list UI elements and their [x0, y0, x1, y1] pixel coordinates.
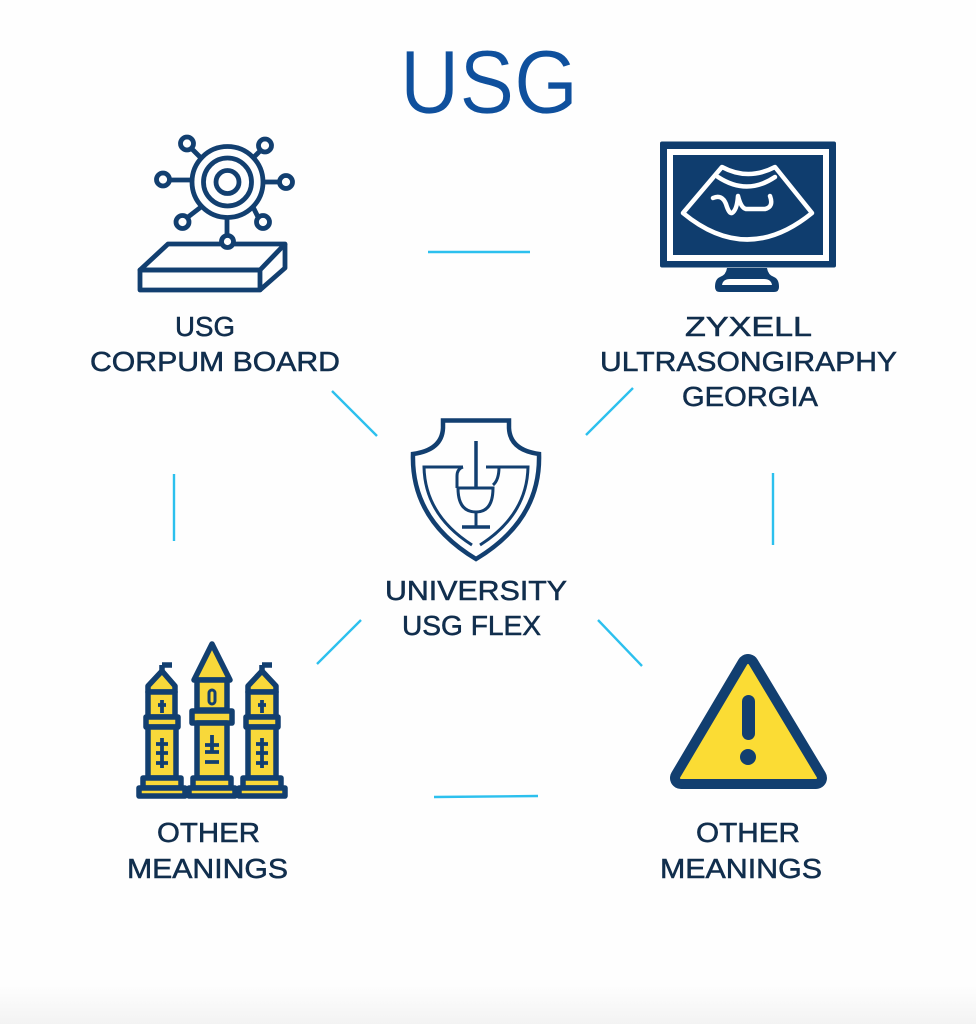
- label: Other Meanings right: MEANINGS: [660, 853, 822, 884]
- node: University USG Flex: [385, 420, 567, 641]
- label: University USG Flex: UNIVERSITY: [385, 575, 567, 606]
- node: Ultrasonography Georgia: [600, 142, 897, 412]
- label: Zyxell Ultrasongiraphy Georgia: ZYXELL: [685, 311, 812, 342]
- label: Zyxell Ultrasongiraphy Georgia: ULTRASONGIRAPHY: [600, 346, 897, 377]
- node: USG Corpum Board: [90, 137, 340, 377]
- label: USG Corpum Board: [90, 311, 340, 377]
- label: Other Meanings right: [660, 817, 822, 884]
- node: Other Meanings (warning): [660, 665, 822, 884]
- connector lines: [174, 252, 773, 797]
- label: USG Corpum Board: CORPUM BOARD: [90, 346, 340, 377]
- icon: ultrasound monitor: [660, 142, 836, 292]
- label: Zyxell Ultrasongiraphy Georgia: GEORGIA: [682, 381, 818, 412]
- label: USG Corpum Board: USG: [175, 311, 235, 342]
- label: University USG Flex: [385, 575, 567, 641]
- icon: shield with goblet: [413, 420, 539, 559]
- label: Other Meanings right: OTHER: [696, 817, 800, 848]
- label: Other Meanings left: OTHER: [157, 817, 260, 848]
- node: Other Meanings (towers): [127, 644, 288, 884]
- tower: right: [239, 665, 285, 796]
- label: Zyxell Ultrasongiraphy Georgia: [600, 311, 897, 412]
- icon: warning triangle: [681, 665, 816, 778]
- tower: center: [189, 644, 235, 796]
- icon: three yellow towers: [139, 644, 285, 796]
- label: Other Meanings left: [127, 817, 288, 884]
- label: Other Meanings left: MEANINGS: [127, 853, 288, 884]
- tower: left: [139, 665, 185, 796]
- label: University USG Flex: USG FLEX: [402, 610, 541, 641]
- title: USG: [400, 33, 578, 133]
- icon: circuit board with target hub: [140, 137, 292, 290]
